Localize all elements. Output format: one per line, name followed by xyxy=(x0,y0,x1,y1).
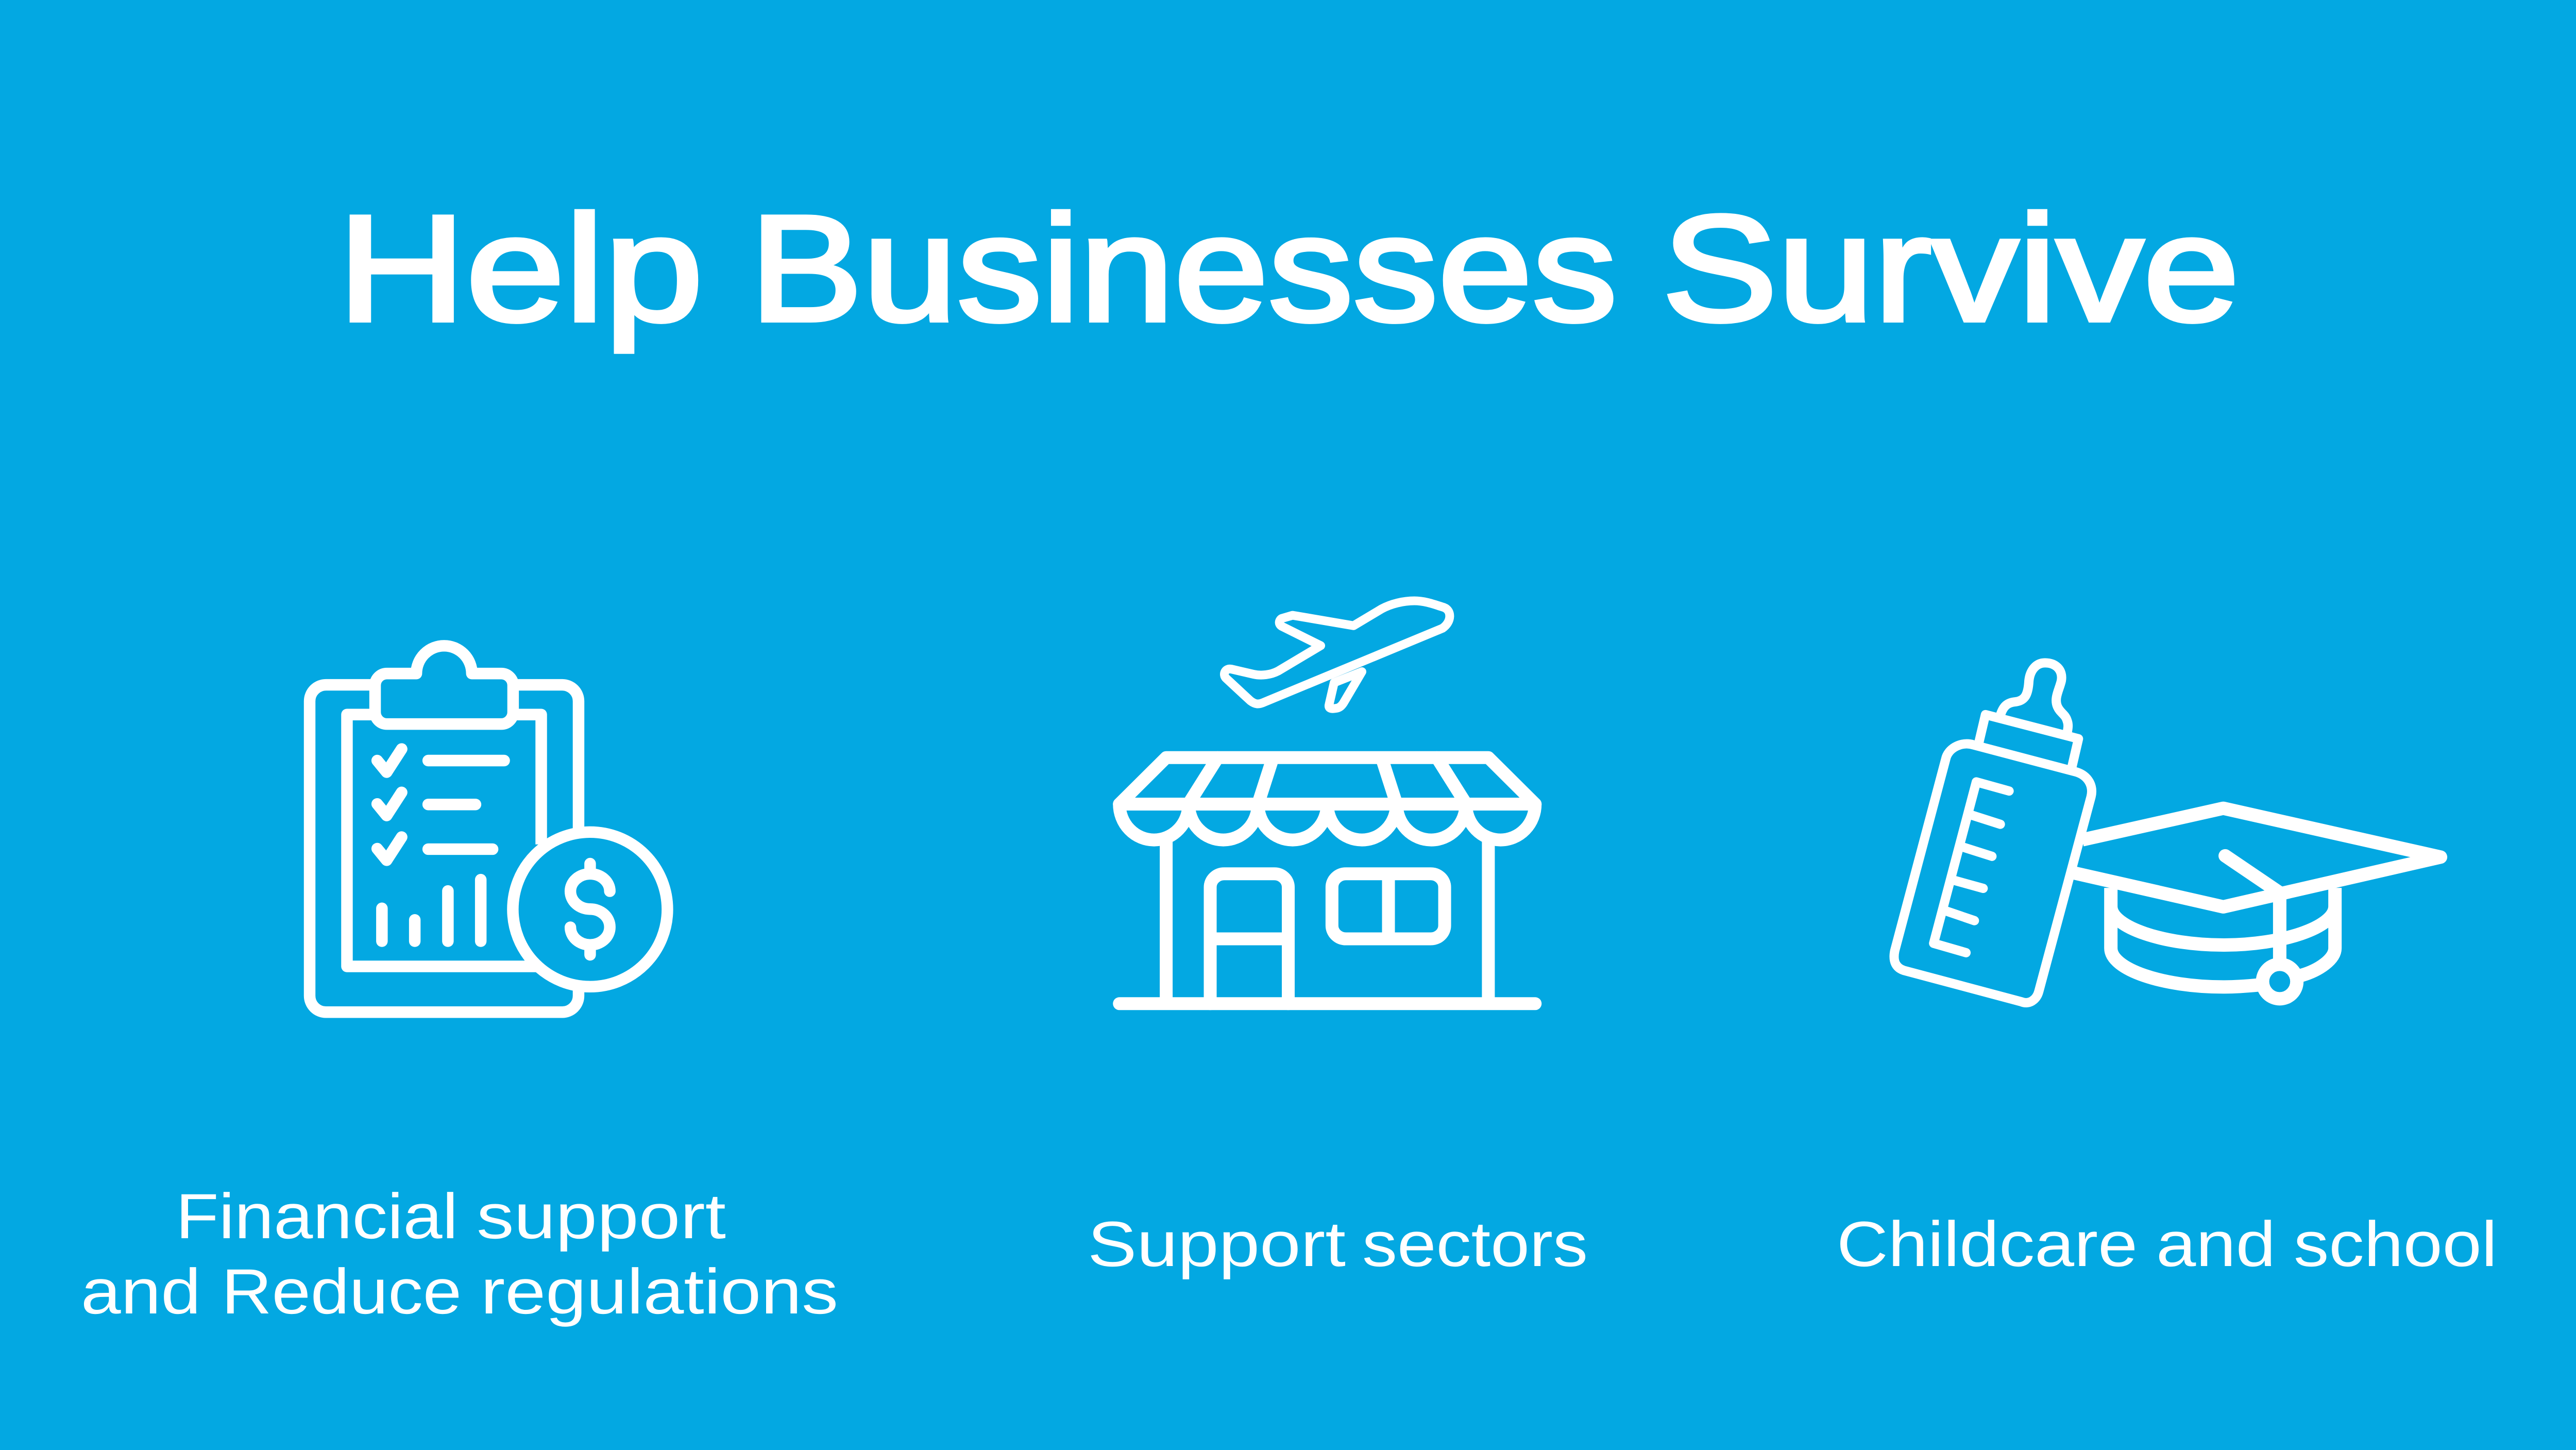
icon: storefront xyxy=(1120,757,1535,1004)
title: Survive xyxy=(1662,184,2240,353)
label: financial support: and xyxy=(81,1256,201,1327)
label: financial support xyxy=(81,1181,838,1327)
label: financial support: Financial xyxy=(176,1181,458,1252)
icon: baby bottle xyxy=(1894,663,2092,1003)
title: Businesses xyxy=(750,184,1617,353)
awning scallops xyxy=(1120,804,1535,840)
awning roof xyxy=(1120,757,1535,804)
window xyxy=(1332,874,1445,939)
checklist lines xyxy=(428,761,504,849)
label: financial support: Reduce xyxy=(222,1256,462,1327)
label: childcare and school xyxy=(1837,1209,2497,1280)
walls and ground xyxy=(1120,841,1535,1004)
title xyxy=(337,184,2240,353)
label: support sectors: Support xyxy=(1088,1209,1346,1280)
label: childcare and school: Childcare xyxy=(1837,1209,2138,1280)
icon: clipboard with checklist, bars and dollar coin xyxy=(310,646,667,1012)
label: financial support: regulations xyxy=(481,1256,838,1327)
label: childcare and school: and xyxy=(2156,1209,2276,1280)
title: Help xyxy=(337,184,703,353)
dollar coin xyxy=(513,832,667,987)
check marks xyxy=(377,749,402,860)
label: financial support: support xyxy=(477,1181,726,1252)
label: childcare and school: school xyxy=(2294,1209,2497,1280)
clipboard board xyxy=(310,685,579,1012)
icon: graduation cap xyxy=(2075,808,2441,999)
door xyxy=(1210,874,1288,1004)
label: support sectors: sectors xyxy=(1362,1209,1588,1280)
paper sheet xyxy=(347,715,541,967)
icon: airplane xyxy=(1225,601,1450,709)
clip xyxy=(375,646,513,724)
label: support sectors xyxy=(1088,1209,1588,1280)
bar chart xyxy=(382,880,481,941)
